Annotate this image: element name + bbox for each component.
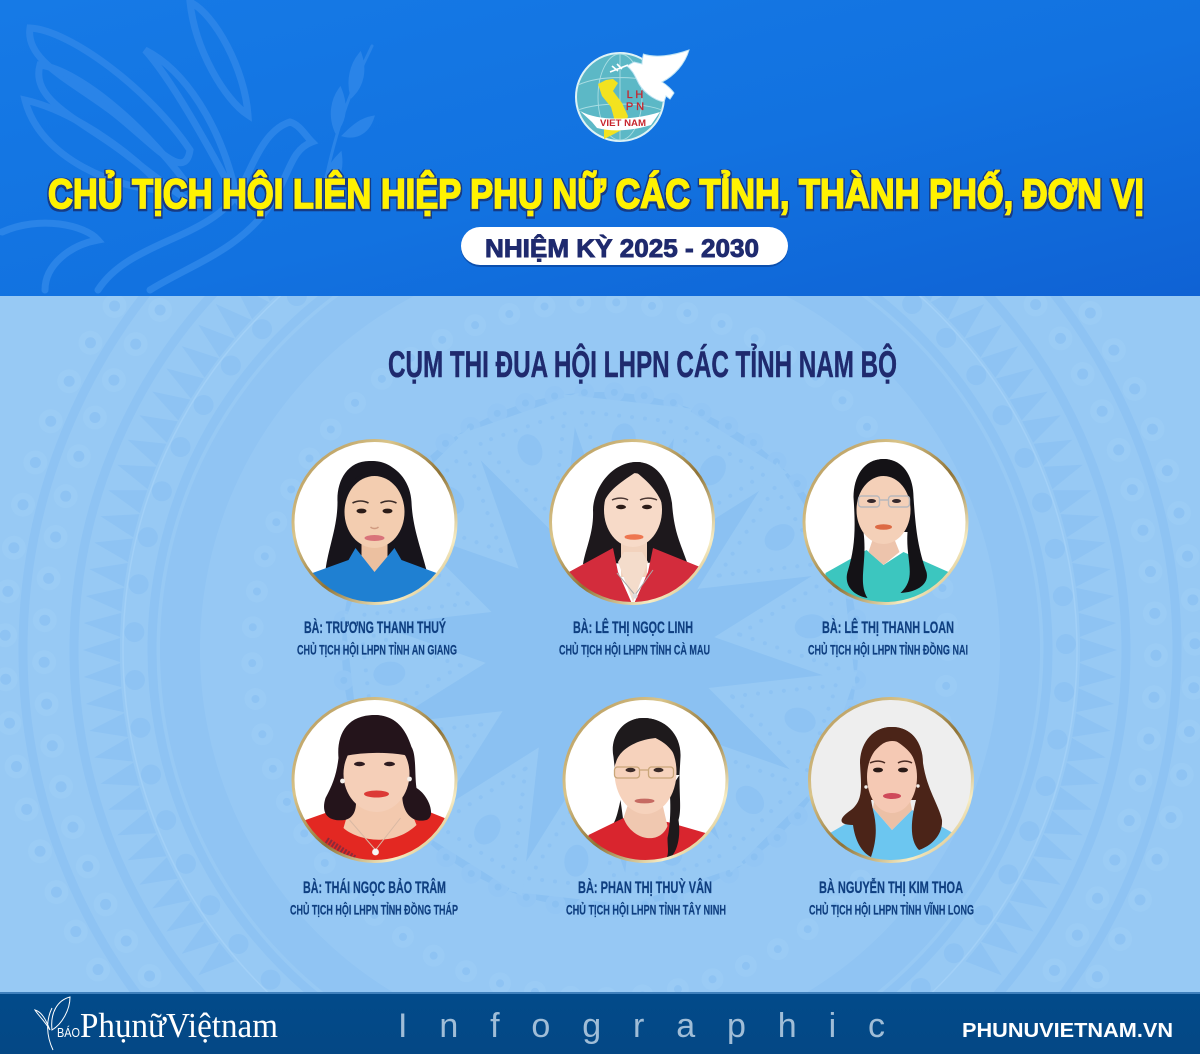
footer logo: [35, 997, 278, 1050]
portrait: Trương Thanh Thuý: [292, 440, 456, 604]
footer bar: [0, 992, 1200, 1054]
caption: Lê Thị Thanh Loan: CHỦ TỊCH HỘI LHPN TỈNH ĐỒNG NAI: [808, 642, 968, 658]
caption: Phan Thị Thuỳ Vân: CHỦ TỊCH HỘI LHPN TỈNH TÂY NINH: [566, 902, 726, 918]
term pill: NHIỆM KỲ 2025 - 2030: [485, 233, 759, 263]
caption: Nguyễn Thị Kim Thoa: [809, 878, 974, 918]
caption: Nguyễn Thị Kim Thoa: BÀ NGUYỄN THỊ KIM THOA: [819, 878, 963, 897]
footer logo: PhụnữViệtnam: [80, 1006, 278, 1045]
map of Vietnam: [598, 79, 628, 139]
logo: Women's Union emblem: [576, 50, 689, 141]
portrait: Lê Thị Thanh Loan: [804, 440, 968, 607]
portrait: Phan Thị Thuỳ Vân: [564, 698, 728, 865]
caption: Lê Thị Ngọc Linh: [559, 618, 710, 658]
portrait: Thái Ngọc Bảo Trâm: [292, 698, 456, 865]
caption: Lê Thị Thanh Loan: BÀ: LÊ THỊ THANH LOAN: [822, 618, 954, 637]
background: bronze drum pattern: [0, 296, 1200, 992]
caption: Thái Ngọc Bảo Trâm: BÀ: THÁI NGỌC BẢO TRÂM: [303, 878, 446, 897]
header band: [0, 0, 1200, 296]
footer website: PHUNUVIETNAM.VN: [962, 1020, 1173, 1042]
caption: Lê Thị Ngọc Linh: CHỦ TỊCH HỘI LHPN TỈNH CÀ MAU: [559, 642, 710, 658]
logo: Women's Union emblem: VIET NAM: [600, 118, 646, 129]
watermark dove: [2, 2, 372, 290]
caption: Thái Ngọc Bảo Trâm: CHỦ TỊCH HỘI LHPN TỈNH ĐỒNG THÁP: [290, 902, 458, 918]
caption: Lê Thị Thanh Loan: [808, 618, 968, 658]
LHPN letters: L H: [627, 89, 643, 101]
caption: Trương Thanh Thuý: BÀ: TRƯƠNG THANH THUÝ: [304, 618, 446, 637]
section heading: CỤM THI ĐUA HỘI LHPN CÁC TỈNH NAM BỘ: [388, 343, 897, 385]
caption: Phan Thị Thuỳ Vân: [566, 878, 726, 918]
dove: [627, 50, 689, 102]
caption: Nguyễn Thị Kim Thoa: CHỦ TỊCH HỘI LHPN TỈNH VĨNH LONG: [809, 902, 974, 918]
footer label: Infographic: [398, 1007, 885, 1045]
caption: Lê Thị Ngọc Linh: BÀ: LÊ THỊ NGỌC LINH: [573, 618, 693, 637]
ribbon: [580, 111, 660, 130]
footer logo: BÁO: [57, 1025, 80, 1040]
caption: Trương Thanh Thuý: CHỦ TỊCH HỘI LHPN TỈNH AN GIANG: [297, 642, 457, 658]
term pill: [461, 227, 788, 267]
caption: Trương Thanh Thuý: [297, 618, 457, 658]
logo: Women's Union emblem: P N: [626, 101, 644, 113]
caption: Phan Thị Thuỳ Vân: BÀ: PHAN THỊ THUỲ VÂN: [578, 878, 712, 897]
caption: Thái Ngọc Bảo Trâm: [290, 878, 458, 918]
portrait: Lê Thị Ngọc Linh: [550, 440, 714, 607]
portrait: Nguyễn Thị Kim Thoa: [809, 698, 973, 865]
